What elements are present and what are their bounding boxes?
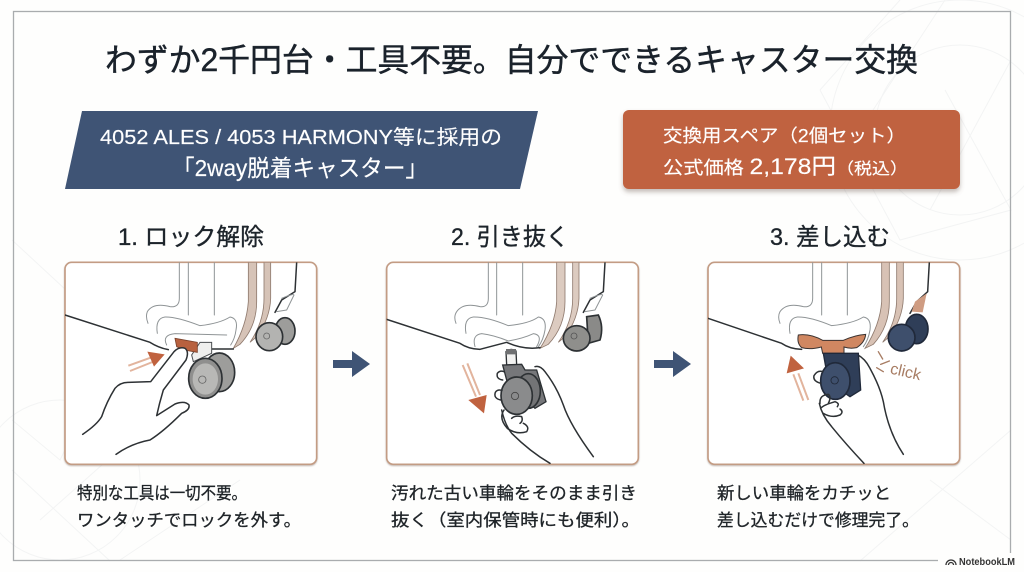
fingers — [814, 371, 842, 416]
banner: models: 4052 ALES / 4053 HARMONY等に採用の — [100, 126, 502, 149]
price box: 公式価格 2,178円 （税込） — [663, 154, 908, 179]
hand back — [819, 354, 903, 463]
rear wheels — [888, 314, 928, 351]
caption: step 1 — [77, 484, 301, 530]
arrow — [463, 363, 487, 413]
step 3 heading: 3. 差し込む — [770, 224, 890, 251]
arrow — [787, 356, 808, 401]
caption: step 2: 抜く（室内保管時にも便利）。 — [391, 511, 640, 530]
caption: step 1: 特別な工具は一切不要。 — [77, 484, 247, 503]
caption: step 3: 新しい車輪をカチッと — [717, 484, 891, 503]
front caster — [189, 342, 235, 398]
caption: step 3 — [717, 484, 919, 530]
arrow: step 1 to 2 — [333, 351, 370, 377]
panel: step 3 illustration — [708, 262, 960, 464]
suitcase body — [387, 262, 605, 349]
caption: step 1: ワンタッチでロックを外す。 — [77, 511, 301, 530]
price box: 交換用スペア（2個セット） — [663, 126, 906, 146]
banner: models: 「2way脱着キャスター」 — [172, 155, 428, 181]
price box — [623, 110, 960, 189]
panel: step 2 illustration — [387, 262, 638, 464]
hand back — [502, 366, 593, 463]
caption: step 2: 汚れた古い車輪をそのまま引き — [391, 484, 637, 503]
lock tab — [175, 338, 197, 352]
rear wheels — [256, 318, 295, 351]
click mark — [876, 351, 922, 380]
NotebookLM badge: NotebookLM — [959, 556, 1015, 568]
banner: models — [65, 111, 538, 189]
caster — [821, 353, 861, 399]
NotebookLM badge — [938, 553, 1024, 572]
suitcase body — [65, 262, 297, 350]
arrow — [128, 352, 165, 371]
fingers — [495, 371, 528, 433]
panel: step 1 illustration — [65, 262, 317, 464]
orange latch — [798, 334, 866, 353]
suitcase body — [708, 262, 929, 349]
title: わずか2千円台・工具不要。自分でできるキャスター交換 — [105, 42, 918, 78]
rear wheel — [563, 315, 602, 351]
caption: step 2 — [391, 484, 640, 530]
step 1 heading: 1. ロック解除 — [118, 224, 264, 251]
click mark: click — [888, 361, 924, 384]
arrow: step 2 to 3 — [654, 351, 691, 377]
caption: step 3: 差し込むだけで修理完了。 — [717, 511, 919, 530]
caster — [501, 349, 546, 414]
hand — [83, 348, 189, 454]
step 2 heading: 2. 引き抜く — [451, 224, 569, 251]
